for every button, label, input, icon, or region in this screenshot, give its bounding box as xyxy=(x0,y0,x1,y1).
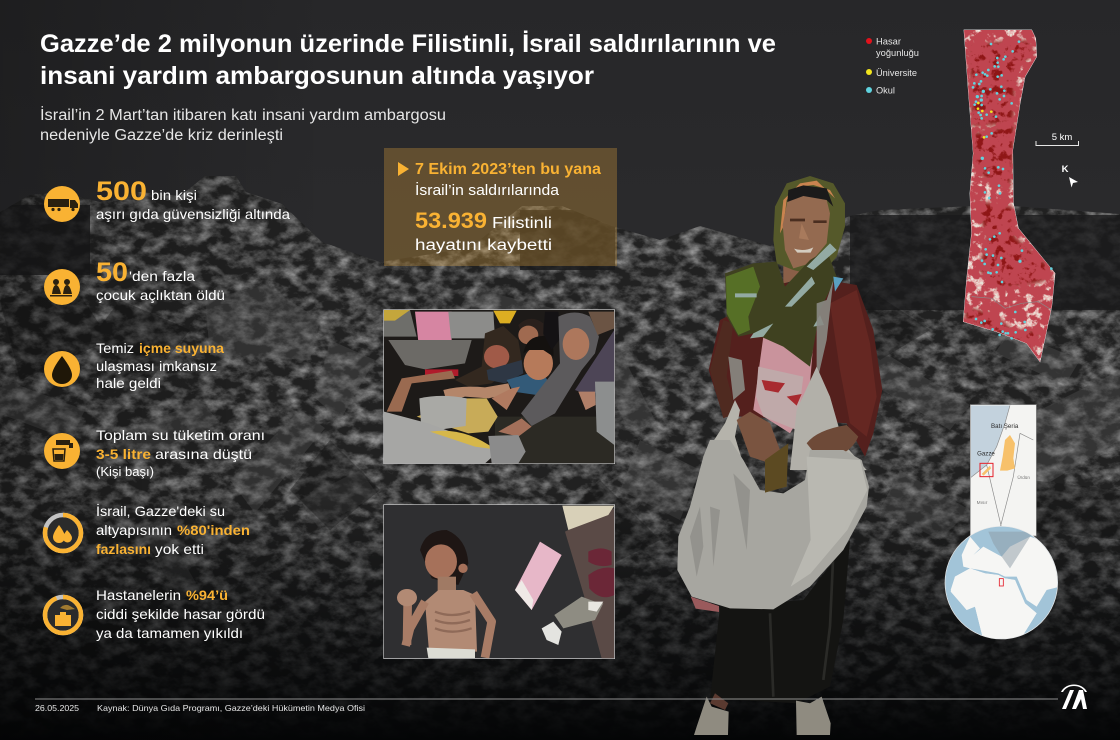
locator map: region xyxy=(970,405,1036,536)
stat: su tüketimi: Toplam su tüketim oranı xyxy=(96,427,265,443)
marker: Gaza box xyxy=(980,463,993,477)
legend: damage map xyxy=(866,36,919,96)
map: Gaza damage density xyxy=(960,27,1060,363)
neck xyxy=(783,260,807,283)
callout: death toll: İsrail’in saldırılarında xyxy=(415,181,560,199)
stat: su altyapısı: yok etti xyxy=(155,541,204,557)
blouse xyxy=(753,337,813,433)
skirt xyxy=(710,540,850,703)
scale bar: 5 km: 5 km xyxy=(1052,132,1072,143)
university markers xyxy=(977,102,993,139)
icon: ring hospital xyxy=(45,597,81,633)
stat: içme suyu: ulaşması imkansız xyxy=(96,358,217,374)
legend item: hasar yoğunluğu: yoğunluğu xyxy=(876,48,919,59)
stat: 500 bin kişi: bin kişi xyxy=(151,187,197,203)
callout: death toll: hayatını kaybetti xyxy=(415,237,552,254)
stat: hastaneler: ya da tamamen yıkıldı xyxy=(96,625,243,641)
footer: date and source: Kaynak: Dünya Gıda Programı, Gazze’deki Hükümetin Medya Ofisi xyxy=(97,703,365,713)
locator map: region: Batı Şeria xyxy=(991,423,1019,430)
logo: AA xyxy=(1061,684,1087,709)
title: Gazze’de 2 milyonun üzerinde Filistinli, İsrail saldırılarının ve xyxy=(40,30,776,58)
locator map: region: Ürdün xyxy=(1017,474,1030,481)
stat: su altyapısı xyxy=(45,502,250,557)
legend item: hasar yoğunluğu: Hasar xyxy=(876,36,901,48)
subtitle xyxy=(40,106,446,144)
callout: death toll xyxy=(384,148,617,266)
icon: children xyxy=(44,269,80,305)
icon: water drop xyxy=(44,351,80,387)
north arrow: K xyxy=(1062,164,1069,175)
stat: hastaneler: ciddi şekilde hasar gördü xyxy=(96,606,265,622)
stat: hastaneler: Hastanelerin xyxy=(96,587,181,603)
title: insani yardım ambargosunun altında yaşıyor xyxy=(40,62,594,90)
globe xyxy=(945,526,1060,640)
stat: su altyapısı: İsrail, Gazze'deki su xyxy=(96,502,225,519)
sack xyxy=(677,440,869,612)
stat: 50 çocuk: 50 xyxy=(96,257,128,287)
face xyxy=(783,195,830,268)
lace strap xyxy=(728,280,833,400)
stat: su altyapısı: fazlasını xyxy=(96,541,151,557)
stat: su tüketimi: 3-5 litre xyxy=(96,446,151,462)
headscarf xyxy=(773,176,845,277)
callout: death toll: 7 Ekim 2023’ten bu yana xyxy=(415,161,601,178)
callout: death toll: 53.939 xyxy=(415,208,487,233)
legend item: hasar yoğunluğu xyxy=(866,36,919,59)
woman figure xyxy=(677,176,882,735)
stat: 500 bin kişi: aşırı gıda güvensizliği altında xyxy=(96,206,290,222)
stat: hastaneler xyxy=(45,587,265,641)
stat: içme suyu: Temiz xyxy=(96,340,134,356)
subtitle: İsrail’in 2 Mart’tan itibaren katı insani yardım ambargosu xyxy=(40,106,446,124)
stat: 50 çocuk: çocuk açlıktan öldü xyxy=(96,287,225,303)
stat: 50 çocuk xyxy=(44,257,225,305)
stat: su tüketimi xyxy=(44,427,265,479)
footer: date and source: 26.05.2025 xyxy=(35,703,79,713)
stat: su tüketimi: (Kişi başı) xyxy=(96,465,154,479)
icon: tap and glass xyxy=(44,433,80,469)
footer rule xyxy=(35,698,1058,700)
hands xyxy=(737,412,785,463)
callout: death toll: Filistinli xyxy=(492,215,552,232)
stat: 500 bin kişi: 500 xyxy=(96,176,147,206)
icon: ring 80 percent xyxy=(45,515,81,551)
locator map: region: Mısır xyxy=(977,500,988,506)
locator map: region: Gazze xyxy=(977,450,995,457)
stat: su tüketimi: arasına düştü xyxy=(155,446,252,462)
stat: içme suyu: içme suyuna xyxy=(139,340,224,356)
stat: 50 çocuk: 'den fazla xyxy=(129,268,195,284)
stat: su altyapısı: %80'inden xyxy=(177,522,250,538)
scale bar: 5 km xyxy=(1036,132,1078,146)
school markers xyxy=(972,40,1053,340)
shoes xyxy=(694,693,831,735)
legend item: okul: Okul xyxy=(876,86,895,96)
scarf drape xyxy=(725,250,837,367)
icon: triangle marker xyxy=(398,162,409,176)
title xyxy=(40,30,776,90)
stat: içme suyu: hale geldi xyxy=(96,375,161,391)
stat: su altyapısı: altyapısının xyxy=(96,522,172,538)
icon: truck xyxy=(44,186,80,222)
photo: food queue xyxy=(383,309,615,464)
photo: malnourished child xyxy=(383,504,615,659)
north arrow xyxy=(1062,164,1078,188)
cardigan xyxy=(709,280,882,457)
stat: 500 bin kişi xyxy=(44,176,290,222)
legend item: üniversite: Üniversite xyxy=(876,68,917,79)
stat: hastaneler: %94’ü xyxy=(186,587,228,603)
stat: içme suyu xyxy=(44,340,224,391)
subtitle: nedeniyle Gazze’de kriz derinleşti xyxy=(40,127,283,144)
sack straps xyxy=(703,400,745,470)
